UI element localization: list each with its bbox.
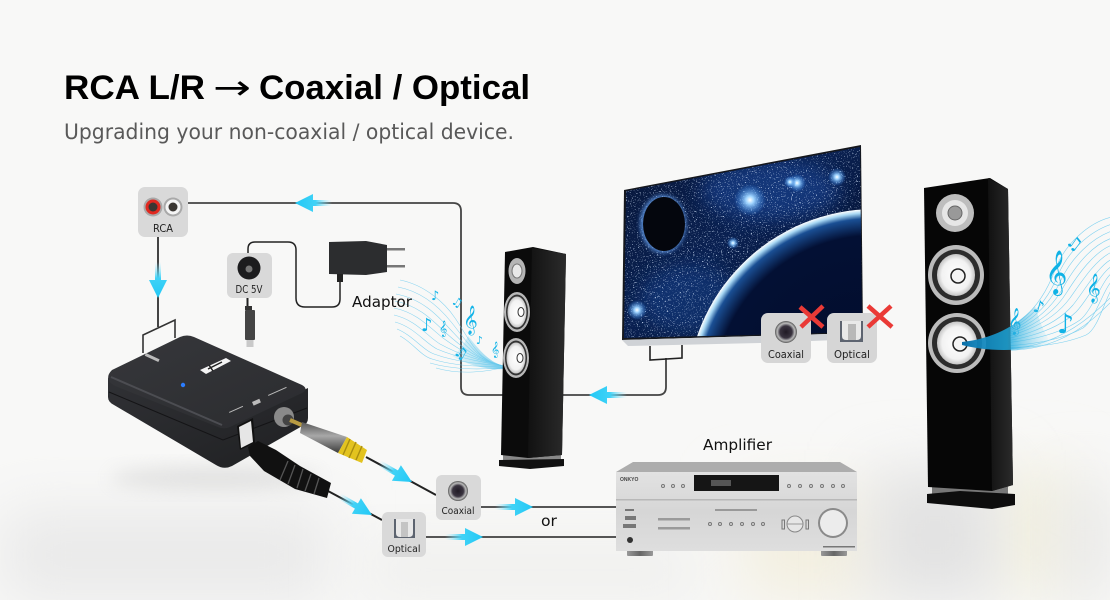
- arrow: optical out: [335, 488, 376, 523]
- cable: RCA to device: [157, 237, 159, 327]
- optical plug and cable: [248, 441, 382, 520]
- amplifier divider: [616, 499, 857, 500]
- arrow: optical to amplifier: [445, 528, 483, 546]
- device: [108, 336, 320, 490]
- optical strain relief ridges: [280, 461, 319, 494]
- red RCA socket: [144, 198, 162, 216]
- white RCA socket: [164, 198, 182, 216]
- tweeter: [936, 194, 974, 232]
- coaxial socket: [775, 321, 797, 343]
- arrow: TV to RCA: [295, 194, 332, 212]
- arrow: RCA to device: [149, 262, 167, 298]
- music notes: large speaker: ♪: [1057, 309, 1074, 340]
- television: [622, 145, 863, 346]
- woofer upper: [928, 245, 984, 305]
- adaptor label: Adaptor: [352, 293, 413, 311]
- amplifier display: [694, 475, 779, 491]
- large speaker sound beam: [962, 306, 1052, 350]
- music notes: small speaker: 𝄞: [439, 321, 447, 337]
- title: Coaxial / Optical: [259, 69, 530, 107]
- tv frame: [622, 145, 863, 340]
- coaxial port: [274, 407, 294, 427]
- music notes: large speaker: 𝄞: [1045, 250, 1067, 296]
- coaxial pin: [290, 420, 304, 426]
- amplifier display readout: [711, 480, 731, 486]
- title: →: [213, 68, 251, 108]
- device top: [108, 336, 306, 428]
- coaxial output tile: [436, 475, 481, 520]
- optical socket: [394, 519, 415, 538]
- or label: or: [541, 512, 558, 530]
- woofer lower: [503, 338, 529, 378]
- coaxial socket: [448, 481, 468, 501]
- coaxial strain relief: [338, 437, 367, 463]
- sound waves: large speaker: [962, 217, 1110, 350]
- optical port: [237, 418, 255, 450]
- amplifier selector knob: [782, 516, 808, 532]
- amplifier feet: [627, 550, 847, 556]
- DC plug: [245, 298, 255, 347]
- DC socket: [238, 256, 260, 280]
- music notes: large speaker: ♪: [1031, 297, 1047, 319]
- adaptor body: [329, 241, 387, 275]
- music notes: small speaker: 𝄞: [463, 305, 478, 335]
- amplifier sliders: [658, 518, 690, 530]
- TV coaxial tile: [761, 313, 811, 363]
- speaker base: [927, 486, 1015, 509]
- amplifier brand: ONKYO: [620, 477, 638, 483]
- optical label: Optical: [388, 544, 420, 555]
- amplifier top: [616, 462, 857, 472]
- red cross: coaxial: [800, 306, 823, 327]
- arrow: TV output: [589, 386, 627, 404]
- woofer lower: [928, 313, 986, 373]
- optical output tile: [382, 512, 426, 557]
- cable: adaptor to DC: [248, 242, 340, 307]
- tv bezel: [622, 333, 863, 346]
- adaptor cable boot: [337, 274, 343, 282]
- adaptor: [329, 241, 405, 282]
- speaker cabinet: [924, 178, 1013, 491]
- amplifier body: [616, 472, 857, 551]
- music notes: small speaker: ♪: [421, 315, 432, 336]
- music notes: large speaker: [1008, 231, 1101, 340]
- device LED: [181, 383, 185, 387]
- adaptor prongs: [387, 248, 405, 268]
- DC 5V tile: [227, 253, 272, 298]
- coaxial label: Coaxial: [768, 349, 804, 361]
- DC 5V label: DC 5V: [236, 284, 263, 296]
- cable bracket: device input: [143, 320, 175, 353]
- music notes: small speaker: ♪: [476, 334, 483, 347]
- title: [64, 68, 530, 108]
- music notes: small speaker: 𝄞: [491, 342, 499, 358]
- music notes: large speaker: ♫: [1062, 231, 1086, 256]
- tv screen: [624, 147, 862, 338]
- RCA label: RCA: [153, 223, 174, 235]
- coaxial plug metal: [300, 422, 347, 453]
- amplifier buttons: [662, 484, 844, 526]
- amplifier volume knob: [818, 508, 848, 538]
- device shadow: [110, 466, 320, 490]
- music notes: small speaker: ♫: [449, 293, 465, 311]
- optical plug body: [248, 441, 331, 498]
- speaker cabinet: [501, 247, 566, 458]
- sound beam: small speaker: [452, 336, 504, 369]
- device body: [108, 378, 308, 468]
- woofer upper: [504, 292, 530, 332]
- sound waves: small speaker: [394, 280, 504, 372]
- RCA tile: [138, 187, 188, 237]
- music notes: large speaker: 𝄞: [1086, 273, 1101, 303]
- coaxial label: Coaxial: [442, 506, 474, 517]
- cable: TV to RCA: [188, 203, 666, 395]
- music notes: small speaker: ♫: [451, 342, 471, 364]
- music notes: small speaker: [421, 289, 499, 364]
- optical cable: [328, 491, 382, 520]
- cable: coaxial to amplifier: [481, 506, 618, 508]
- cable bracket: TV output: [650, 345, 682, 360]
- speaker base: [499, 455, 564, 469]
- amplifier: [616, 462, 857, 556]
- cable: optical to amplifier: [426, 536, 618, 538]
- arrow: coaxial out: [375, 455, 416, 490]
- music notes: large speaker: 𝄞: [1008, 309, 1022, 336]
- optical label: Optical: [834, 349, 870, 361]
- optical socket: [840, 321, 863, 342]
- device top edge highlight: [111, 377, 222, 425]
- red cross: optical: [868, 306, 892, 327]
- TV optical tile: [827, 313, 877, 363]
- small speaker: [499, 247, 566, 469]
- music notes: small speaker: ♪: [431, 289, 439, 304]
- amplifier headphone jack: [627, 537, 633, 543]
- coaxial plug and cable: [290, 420, 436, 495]
- coaxial cable: [366, 457, 436, 495]
- amplifier small labels: [623, 509, 855, 548]
- large speaker: [924, 178, 1015, 509]
- title: RCA L/R: [64, 69, 205, 107]
- device logo: [200, 358, 231, 374]
- device top labels: [145, 353, 287, 413]
- device side seam: [109, 392, 307, 440]
- amplifier label: Amplifier: [703, 436, 773, 454]
- subtitle: Upgrading your non-coaxial / optical device.: [64, 120, 514, 145]
- arrow: coaxial to amplifier: [495, 498, 533, 516]
- tweeter: [508, 258, 526, 284]
